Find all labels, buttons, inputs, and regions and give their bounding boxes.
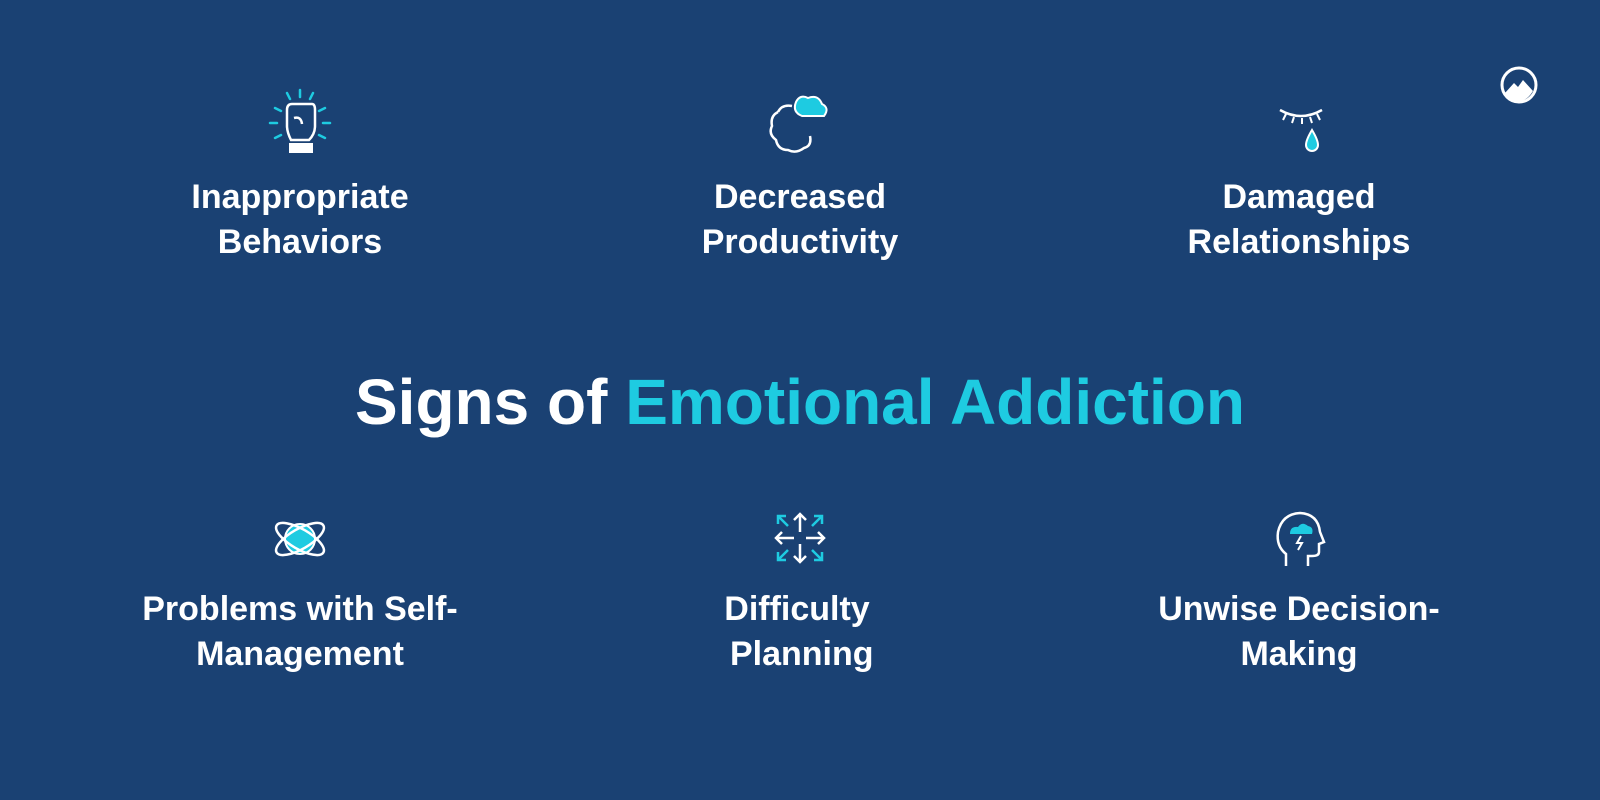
label: inappropriate behaviors bbox=[191, 178, 409, 261]
label: problems with self-management: Management bbox=[196, 635, 404, 673]
icon: fist bbox=[268, 88, 332, 153]
label: difficulty planning: Difficulty bbox=[724, 590, 870, 628]
label: unwise decision-making: Making bbox=[1240, 635, 1358, 673]
label: damaged relationships: Damaged bbox=[1222, 178, 1376, 216]
icon: atom brain bbox=[274, 522, 326, 556]
label: unwise decision-making: Unwise Decision- bbox=[1158, 590, 1440, 628]
label: difficulty planning: Planning bbox=[730, 635, 874, 673]
label: decreased productivity bbox=[702, 178, 898, 261]
label: problems with self-management: Problems with Self- bbox=[142, 590, 458, 628]
icon: brain puzzle bbox=[769, 96, 828, 153]
title: Signs of Emotional Addiction bbox=[355, 366, 1245, 438]
label: damaged relationships: Relationships bbox=[1188, 223, 1410, 261]
icon: arrows bbox=[774, 512, 826, 564]
label: difficulty planning bbox=[724, 590, 874, 673]
icon: head storm bbox=[1276, 512, 1326, 566]
label: unwise decision-making bbox=[1158, 590, 1440, 673]
logo bbox=[1500, 66, 1538, 104]
icon: crying eye bbox=[1279, 108, 1323, 152]
label: inappropriate behaviors: Behaviors bbox=[218, 223, 382, 261]
label: inappropriate behaviors: Inappropriate bbox=[191, 178, 409, 216]
label: decreased productivity: Decreased bbox=[714, 178, 886, 216]
label: problems with self-management bbox=[142, 590, 458, 673]
label: decreased productivity: Productivity bbox=[702, 223, 898, 261]
label: damaged relationships bbox=[1188, 178, 1410, 261]
